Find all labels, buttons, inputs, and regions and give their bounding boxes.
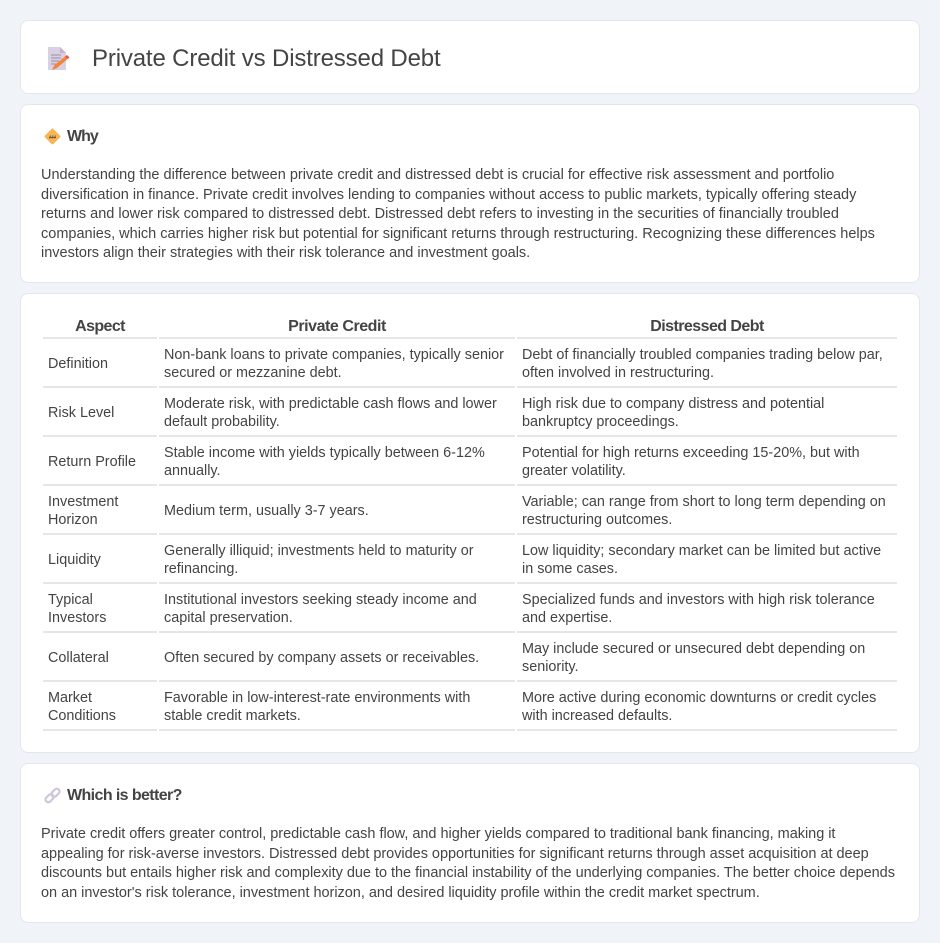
row: investment horizon: Horizon [48, 512, 98, 528]
row: liquidity: Generally illiquid; investments held to maturity or [164, 543, 474, 559]
row: return profile: Potential for high returns exceeding 15-20%, but with [522, 445, 860, 461]
text block: why explanation: diversification in finance. Private credit involves lending to companies without access to public markets, typically offering steady [41, 186, 856, 202]
row: definition [48, 347, 883, 381]
icon: warning diamond [44, 128, 60, 144]
row: market conditions: Conditions [48, 708, 116, 724]
row: definition: Debt of financially troubled companies trading below par, [522, 347, 883, 363]
row: return profile: greater volatility. [522, 463, 626, 479]
row: investment horizon: Variable; can range from short to long term depending on [522, 494, 886, 510]
row: return profile: Stable income with yields typically between 6-12% [164, 445, 485, 461]
row: liquidity: Liquidity [48, 552, 101, 568]
row: typical investors: Typical [48, 592, 93, 608]
icon: chain link [44, 788, 61, 804]
row: liquidity: in some cases. [522, 561, 618, 577]
row: risk level: Risk Level [48, 405, 114, 421]
row: risk level: default probability. [164, 414, 280, 430]
text block: verdict: on an investor's risk tolerance, investment horizon, and desired liquidity profile within the credit market spectrum. [41, 884, 760, 900]
row: investment horizon: Medium term, usually 3-7 years. [164, 503, 369, 519]
row: typical investors: and expertise. [522, 610, 612, 626]
icon: memo with pencil [48, 47, 70, 70]
row: typical investors: Institutional investors seeking steady income and [164, 592, 477, 608]
row: collateral: seniority. [522, 659, 579, 675]
text block: why explanation: investors align their strategies with their risk tolerance and investment goals. [41, 245, 530, 261]
row: market conditions: stable credit markets. [164, 708, 301, 724]
panel: why [20, 104, 920, 283]
row: definition: secured or mezzanine debt. [164, 365, 342, 381]
row: liquidity: refinancing. [164, 561, 238, 577]
panel: which is better [20, 763, 920, 923]
panel: comparison table [20, 293, 920, 753]
row: market conditions [48, 690, 876, 724]
row: collateral: Collateral [48, 650, 109, 666]
row: market conditions: Favorable in low-interest-rate environments with [164, 690, 470, 706]
text block: verdict: discounts but entails higher risk and complexity due to the financial instability of the underlying companies. The better choice depends [41, 865, 895, 881]
row: definition: Non-bank loans to private companies, typically senior [164, 347, 504, 363]
row: collateral: Often secured by company assets or receivables. [164, 650, 479, 666]
text block: verdict: Private credit offers greater control, predictable cash flow, and higher yields compared to traditional bank financing, making it [41, 826, 835, 842]
row: return profile: Return Profile [48, 454, 136, 470]
row: investment horizon: Investment [48, 494, 118, 510]
row: investment horizon [48, 494, 886, 528]
row: definition: often involved in restructuring. [522, 365, 714, 381]
row: collateral: May include secured or unsecured debt depending on [522, 641, 865, 657]
row: definition: Definition [48, 356, 108, 372]
text block: why explanation: returns and lower risk compared to distressed debt. Distressed debt refers to investing in the securities of financially troubled [41, 206, 839, 222]
row: typical investors [48, 592, 875, 626]
panel: title card [20, 20, 920, 94]
heading: why: Why [67, 128, 98, 145]
row: typical investors: capital preservation. [164, 610, 293, 626]
row: typical investors: Investors [48, 610, 106, 626]
row: market conditions: with increased defaults. [522, 708, 672, 724]
table header row: Private Credit [288, 318, 386, 335]
row: collateral [48, 641, 865, 675]
table header row: Aspect [75, 318, 125, 335]
text block: why explanation: Understanding the difference between private credit and distressed debt is crucial for effective risk assessment and portfolio [41, 167, 834, 183]
row: risk level: bankruptcy proceedings. [522, 414, 679, 430]
row: market conditions: Market [48, 690, 92, 706]
row: risk level [48, 396, 824, 430]
text block: why explanation [41, 167, 875, 261]
row: typical investors: Specialized funds and investors with high risk tolerance [522, 592, 875, 608]
title: Private Credit vs Distressed Debt [92, 45, 440, 72]
heading: which is better: Which is better? [67, 787, 182, 804]
row: risk level: Moderate risk, with predictable cash flows and lower [164, 396, 497, 412]
row: return profile: annually. [164, 463, 221, 479]
text block: verdict: appealing for risk-averse investors. Distressed debt provides opportunities for significant returns through asset acquisition at deep [41, 846, 869, 862]
text block: verdict [41, 826, 895, 900]
row: investment horizon: restructuring outcomes. [522, 512, 672, 528]
row: liquidity [48, 543, 881, 577]
table header row [75, 318, 764, 335]
row: return profile [48, 445, 860, 479]
text block: why explanation: companies, which carries higher risk but potential for significant returns through restructuring. Recognizing these differences helps [41, 226, 875, 242]
row: liquidity: Low liquidity; secondary market can be limited but active [522, 543, 881, 559]
table header row: Distressed Debt [650, 318, 764, 335]
row: market conditions: More active during economic downturns or credit cycles [522, 690, 876, 706]
row: risk level: High risk due to company distress and potential [522, 396, 824, 412]
